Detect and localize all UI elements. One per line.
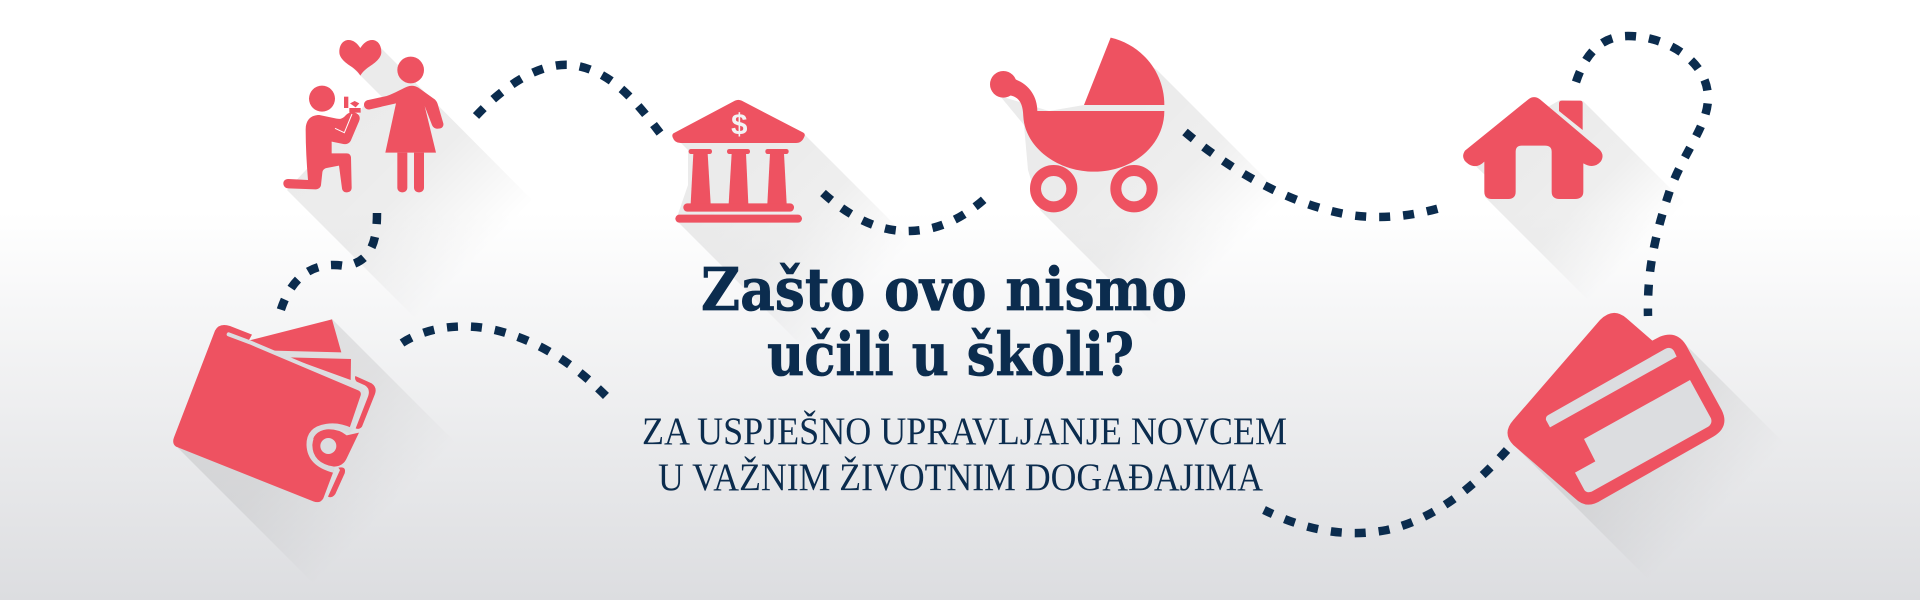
roof xyxy=(672,100,805,143)
back flap strips xyxy=(328,376,376,497)
woman xyxy=(364,57,443,192)
magnetic strip xyxy=(1546,348,1677,427)
clasp ring xyxy=(309,426,351,470)
heart xyxy=(339,40,381,76)
wallet body xyxy=(173,325,363,502)
card panel xyxy=(1575,380,1711,492)
icon: credit cards xyxy=(1507,313,1860,600)
icon: proposing couple with heart xyxy=(283,40,565,345)
subtitle: ZA USPJEŠNO UPRAVLJANJE NOVCEM xyxy=(642,409,1287,453)
flap line xyxy=(229,334,363,430)
base xyxy=(675,203,802,223)
clasp button xyxy=(320,438,336,454)
icon: baby pram xyxy=(990,38,1337,370)
card outline xyxy=(1507,313,1724,505)
basket and handle xyxy=(990,71,1164,172)
title: Zašto ovo nismo xyxy=(701,255,1187,324)
columns xyxy=(689,149,789,204)
chimney xyxy=(1559,101,1583,130)
hood xyxy=(1084,38,1164,105)
subtitle: U VAŽNIM ŽIVOTNIM DOGAĐAJIMA xyxy=(658,455,1263,499)
subtitle xyxy=(642,409,1287,499)
man kneeling with ring xyxy=(283,86,361,192)
dashed path: house to credit card xyxy=(1576,36,1708,316)
icon: wallet xyxy=(173,319,480,600)
title xyxy=(701,255,1187,389)
dashed path: couple to bank xyxy=(476,65,660,133)
dashed path: credit card to headline xyxy=(1264,450,1507,533)
dollar sign: $ xyxy=(731,108,747,141)
cards xyxy=(248,319,351,380)
icon: house xyxy=(1463,97,1720,312)
wheels xyxy=(1035,170,1152,207)
dashed path: pram to house xyxy=(1185,132,1440,217)
icon: bank building xyxy=(672,100,935,379)
dashed path: wallet to couple xyxy=(279,213,377,316)
house body xyxy=(1463,97,1603,199)
title: učili u školi? xyxy=(767,320,1134,389)
dashed path: bank to pram xyxy=(823,193,989,231)
clasp tab xyxy=(312,429,359,467)
dashed path: wallet to headline xyxy=(402,326,608,398)
